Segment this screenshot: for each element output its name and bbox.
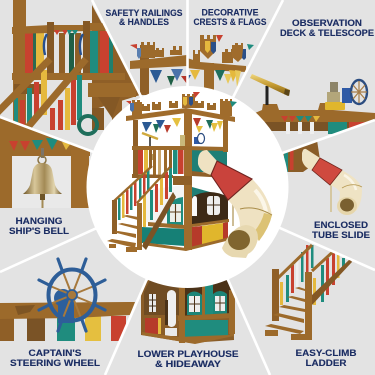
- label: enclosed: ENCLOSED: [314, 220, 368, 230]
- panel: lower playhouse: [141, 278, 235, 344]
- crenellated roof: [126, 92, 237, 122]
- panel: observation deck and telescope: [250, 74, 375, 134]
- stair steps: [265, 287, 307, 340]
- stair steps: [107, 215, 138, 252]
- center circle: [86, 86, 288, 288]
- roof pennant flags: [142, 118, 223, 133]
- panel: enclosed tube slide: [283, 140, 362, 215]
- tube: [302, 149, 320, 170]
- upper wall panels: [138, 150, 227, 176]
- icon: small telescope: [142, 133, 158, 146]
- icon: bell: [23, 148, 62, 208]
- label: ladder: LADDER: [306, 358, 347, 368]
- label: crests and flags: CRESTS & FLAGS: [194, 17, 267, 27]
- center tube slide: [198, 150, 272, 258]
- icon: navy steering wheel: [351, 80, 367, 104]
- center illustration: castle playset: [107, 92, 272, 258]
- wooden posts and beams: [132, 113, 228, 250]
- panel: hanging ship's bell: [0, 110, 90, 208]
- label: safety railings second line: & HANDLES: [119, 17, 169, 27]
- label: tube slide: TUBE SLIDE: [312, 230, 370, 240]
- panel: easy-climb ladder: [265, 245, 352, 340]
- label: hideaway: & HIDEAWAY: [155, 359, 221, 369]
- label: observation: OBSERVATION: [292, 18, 362, 28]
- label: steering wheel: STEERING WHEEL: [10, 358, 101, 368]
- lower playhouse walls: [142, 185, 230, 251]
- icon: steering wheel: [39, 259, 105, 331]
- stair railings and balusters: [107, 150, 176, 252]
- icon: small steering wheel: [180, 134, 204, 146]
- label: deck and telescope: DECK & TELESCOPE: [280, 28, 374, 38]
- label: captain's: CAPTAIN'S: [28, 348, 82, 358]
- label: lower playhouse: LOWER PLAYHOUSE: [138, 349, 239, 359]
- label: hanging: HANGING: [16, 216, 63, 226]
- icon: telescope: [250, 74, 290, 105]
- panel: decorative crests right: [187, 35, 254, 93]
- label: easy-climb: EASY-CLIMB: [296, 348, 356, 358]
- label: decorative crests: DECORATIVE: [202, 8, 259, 18]
- label: ship's bell: SHIP'S BELL: [9, 226, 70, 236]
- panel: decorative crests left: [130, 42, 187, 95]
- label: safety railings and handles: SAFETY RAILINGS: [106, 8, 183, 18]
- panel: captain's steering wheel: [0, 259, 135, 341]
- panel: safety railings close-up: [0, 0, 140, 150]
